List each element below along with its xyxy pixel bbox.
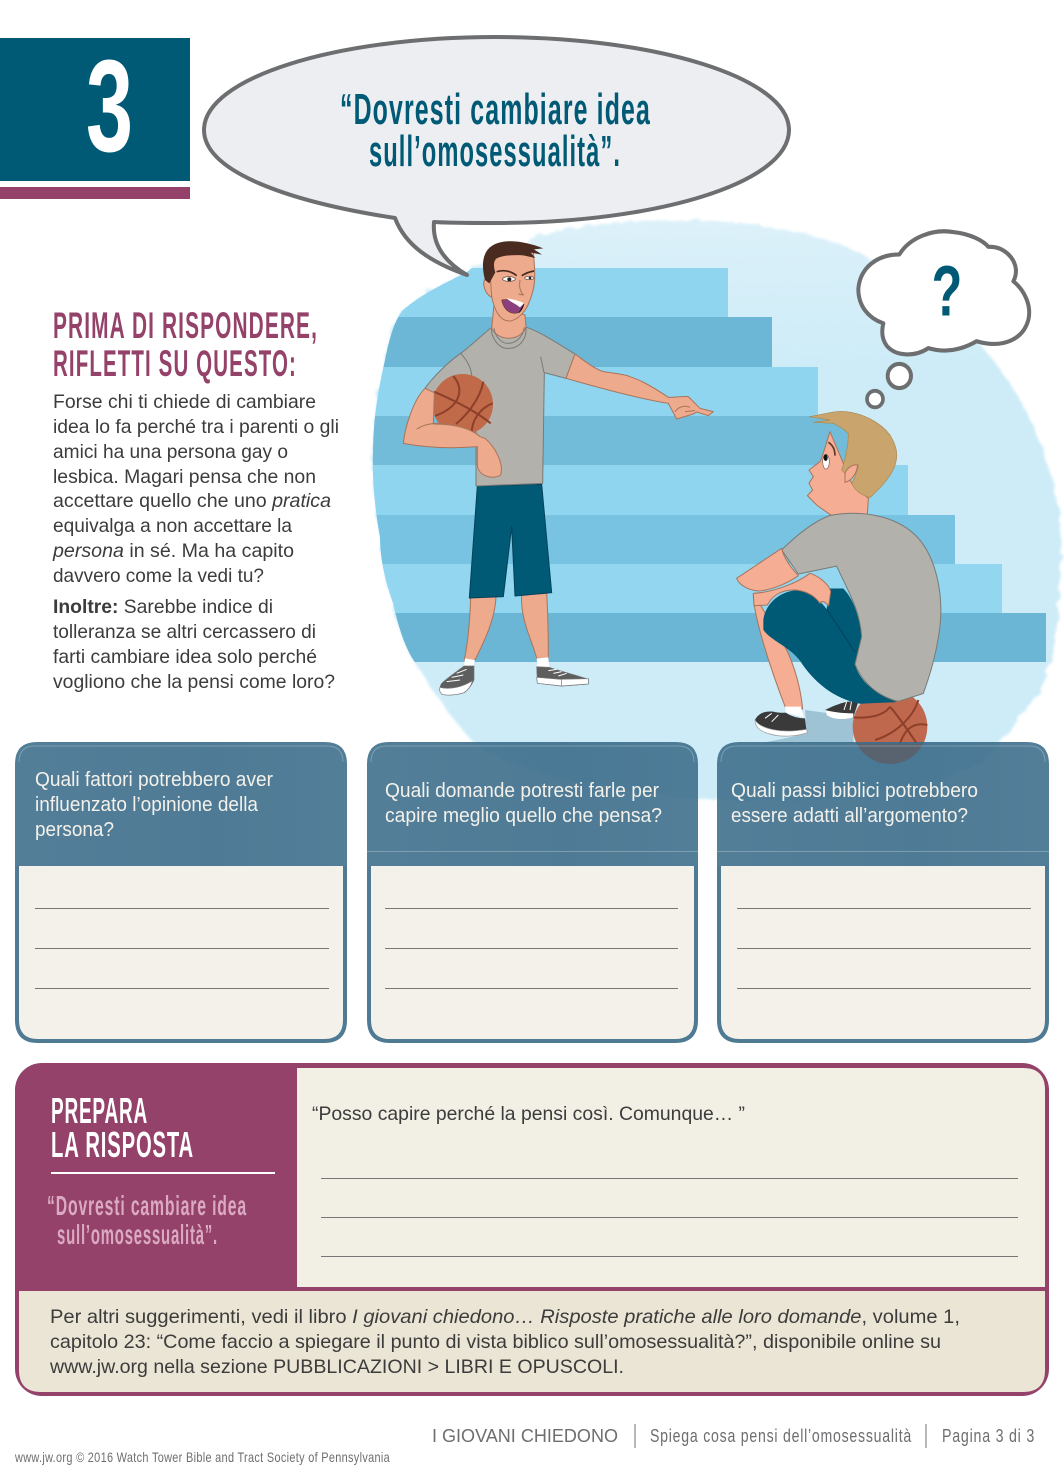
response prompt and lines: “Posso capire perché la pensi così. Comunque… ” (312, 1103, 745, 1125)
panel: question 3 (717, 742, 1049, 1043)
intro text block: amici ha una persona gay o (53, 441, 288, 463)
speech bubble: sull’omosessualità”. (369, 127, 621, 176)
prepara heading: LA RISPOSTA (51, 1124, 194, 1165)
number tab: 3 (0, 32, 190, 199)
quoted objection: “Dovresti cambiare idea (47, 1190, 247, 1221)
panel: prepara la risposta (15, 1063, 1049, 1396)
speech bubble (204, 37, 789, 275)
quoted objection: sull’omosessualità”. (57, 1219, 218, 1250)
inoltre text block: vogliono che la pensi come loro? (53, 671, 335, 693)
ball under sitting boy (853, 689, 927, 764)
intro text block: persona in sé. Ma ha capito (52, 540, 294, 562)
intro text block: accettare quello che uno pratica (53, 490, 331, 512)
panel: question 2 (367, 742, 698, 1041)
inoltre text block (53, 596, 335, 693)
intro text block: lesbica. Magari pensa che non (53, 466, 316, 488)
intro text block: equivalga a non accettare la (53, 515, 292, 537)
inoltre text block: tolleranza se altri cercassero di (53, 621, 316, 643)
sitting boy on basketball (737, 411, 941, 764)
footer: Pagina 3 di 3 (942, 1425, 1035, 1446)
prepara heading (51, 1090, 194, 1165)
panel: question 1: Quali fattori potrebbero aver (35, 769, 273, 791)
further reading text: www.jw.org nella sezione PUBBLICAZIONI > LIBRI E OPUSCOLI. (49, 1356, 624, 1378)
quoted objection (47, 1190, 247, 1250)
background illustration: blue blob and stairs (370, 220, 1062, 801)
footer: Spiega cosa pensi dell’omosessualità (650, 1425, 912, 1446)
footer (14, 1424, 1035, 1465)
panel: question 3: essere adatti all’argomento? (731, 805, 968, 827)
intro text block: davvero come la vedi tu? (53, 565, 264, 587)
intro text block (52, 391, 339, 587)
intro text block: idea lo fa perché tra i parenti o gli (53, 416, 339, 438)
heading: prima di rispondere: RIFLETTI SU QUESTO: (53, 343, 297, 384)
ball held by standing boy (432, 374, 493, 435)
intro text block: Forse chi ti chiede di cambiare (53, 391, 316, 413)
further reading text: Per altri suggerimenti, vedi il libro I giovani chiedono… Risposte pratiche alle loro domande , volume 1, (50, 1306, 960, 1328)
sitting boy head (807, 411, 897, 517)
prepara heading: PREPARA (51, 1090, 148, 1131)
heading: prima di rispondere: PRIMA DI RISPONDERE, (53, 305, 318, 346)
thought cloud with question mark: ? (932, 250, 962, 331)
number tab: 3: 3 (86, 32, 133, 179)
panel: question 1 (15, 742, 347, 1041)
inoltre text block: farti cambiare idea solo perché (53, 646, 317, 668)
panel: question 1: influenzato l’opinione della (35, 794, 259, 816)
thought cloud with question mark (858, 231, 1029, 407)
further reading text: capitolo 23: “Come faccio a spiegare il punto di vista biblico sull’omosessualità?”, disponibile online su (50, 1331, 941, 1353)
panel: question 1: persona? (35, 819, 114, 841)
panel: question 3: Quali passi biblici potrebbero (731, 780, 978, 802)
footer: I GIOVANI CHIEDONO (432, 1425, 618, 1446)
panel: question 2: capire meglio quello che pensa? (385, 805, 662, 827)
response prompt and lines (312, 1103, 1018, 1256)
inoltre text block: Inoltre: Sarebbe indice di (53, 596, 273, 618)
speech bubble: “Dovresti cambiare idea (340, 85, 651, 134)
panel: question 2: Quali domande potresti farle per (385, 780, 659, 802)
heading: prima di rispondere (53, 305, 318, 384)
footer: www.jw.org © 2016 Watch Tower Bible and Tract Society of Pennsylvania (14, 1449, 390, 1465)
standing boy with basketball, pointing (403, 241, 713, 695)
further reading text (49, 1306, 960, 1378)
